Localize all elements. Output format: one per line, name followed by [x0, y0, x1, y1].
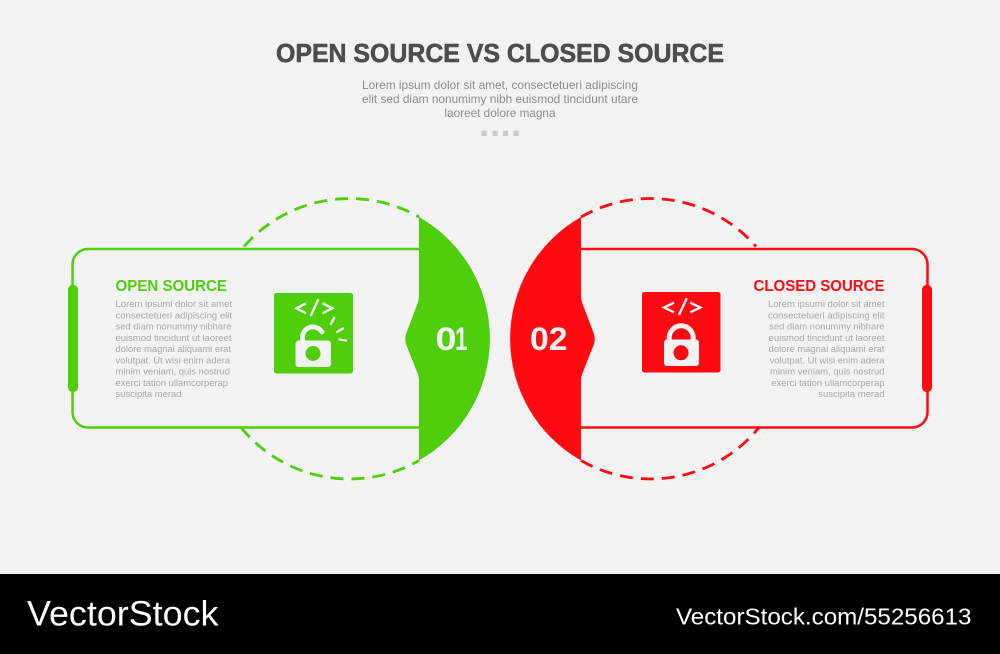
body text: open source: sed diam nonummy nibhare: [116, 320, 232, 332]
subtitle text block: Lorem ipsum dolor sit amet, consectetueri adipiscing: [362, 78, 638, 92]
body text: open source: euismod tincidunt ut laoreet: [116, 332, 232, 343]
body text: closed source: sed diam nonummy nibhare: [769, 320, 884, 332]
title: OPEN SOURCE VS CLOSED SOURCE: [276, 38, 724, 68]
subtitle text block: laoreet dolore magna: [444, 106, 556, 120]
footer image id: VectorStock.com/55256613: [676, 603, 972, 629]
dashed circle outline: closed source: [581, 199, 759, 479]
heading: open source: OPEN SOURCE: [116, 278, 227, 295]
body text: open source: suscipita merad: [116, 388, 182, 399]
body text: closed source: minim veniam, quis nostrud: [770, 366, 884, 376]
body text: closed source: dolore magnai aliquami erat: [769, 343, 885, 354]
heading: closed source: CLOSED SOURCE: [754, 278, 885, 295]
body text: closed source: volutpat. Ut wisi enim adera: [770, 354, 885, 365]
side accent bar: closed source: [922, 285, 932, 392]
body text: closed source: [768, 298, 885, 399]
icon: open padlock with code: [274, 293, 353, 374]
subtitle text block: [362, 78, 638, 120]
body text: closed source: consectetueri adipiscing elit: [768, 309, 885, 320]
body text: open source: exerci tation ullamcorperap: [116, 377, 228, 388]
body text: open source: consectetueri adipiscing elit: [116, 309, 232, 320]
subtitle text block: elit sed diam nonumimy nibh euismod tincidunt utare: [362, 92, 638, 106]
circle segment badge: closed source: [510, 217, 595, 460]
footer band: [0, 574, 1000, 654]
panel: closed source: [510, 199, 932, 479]
side accent bar: open source: [68, 285, 78, 392]
rounded card outline: closed source: [581, 249, 928, 428]
number 01: 1: [455, 321, 468, 357]
number 01: [436, 321, 468, 357]
number 01: 0: [436, 321, 456, 357]
body text: closed source: euismod tincidunt ut laoreet: [769, 332, 885, 343]
body text: open source: [116, 298, 232, 399]
body text: closed source: Lorem ipsumi dolor sit amet: [768, 298, 885, 309]
body text: open source: dolore magnai aliquami erat: [116, 343, 231, 354]
body text: open source: volutpat. Ut wisi enim adera: [116, 354, 231, 365]
title pagination dots: [482, 131, 519, 136]
body text: open source: minim veniam, quis nostrud: [116, 366, 230, 376]
rounded card outline: open source: [72, 249, 419, 428]
body text: closed source: suscipita merad: [818, 388, 884, 399]
body text: open source: Lorem ipsumi dolor sit amet: [116, 298, 232, 309]
circle segment badge: open source: [405, 217, 490, 460]
body text: closed source: exerci tation ullamcorperap: [771, 377, 884, 388]
icon: closed padlock with code: [642, 292, 720, 372]
panel: open source: [68, 199, 490, 479]
footer wordmark: VectorStock: [27, 594, 219, 634]
dashed circle outline: open source: [241, 199, 419, 479]
number 02: 02: [530, 321, 568, 357]
